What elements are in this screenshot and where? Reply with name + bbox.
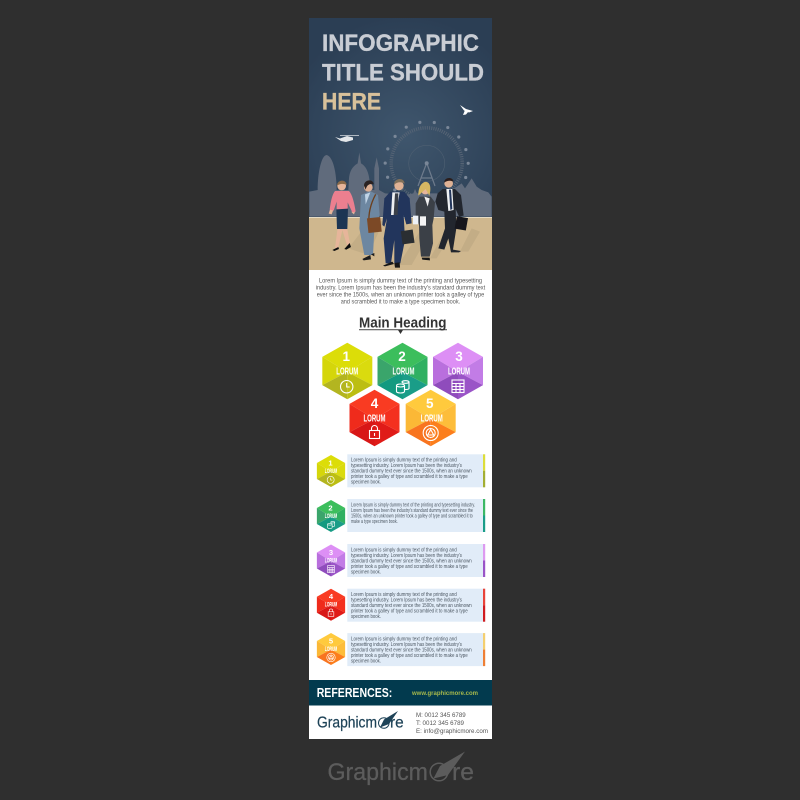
hexagon 3 (433, 343, 483, 399)
contact details: E: info@graphicmore.com (416, 728, 488, 735)
hexagon 4: 4 (371, 396, 379, 411)
text box 5: printer took a galley of type and scrambled it to make a type (351, 653, 468, 659)
small hexagon 1: 1 (328, 458, 333, 467)
text box 1: specimen book. (351, 480, 381, 486)
small hexagon 4: 4 (329, 592, 334, 601)
row 1 (317, 454, 485, 487)
text box 2: Lorem Ipsum has been the industry's standard dummy text ever since the (351, 508, 473, 514)
person: woman in pink (329, 181, 356, 251)
text box 2: Lorem Ipsum is simply dummy text of the printing and typesetting industry. (351, 503, 475, 509)
title (322, 30, 484, 116)
small hexagon 3: 3 (329, 548, 333, 557)
ferris wheel (385, 122, 468, 205)
small hexagon 5: 5 (329, 636, 334, 645)
title: TITLE SHOULD (322, 60, 484, 86)
icon: plane (460, 105, 473, 115)
text box 2: make a type specimen book. (351, 519, 398, 525)
references bar: REFERENCES: (317, 686, 392, 700)
row 2 (317, 499, 485, 532)
hexagon 2: LORUM (392, 366, 415, 378)
text box 3: typesetting industry. Lorem Ipsum has been the industry's (351, 553, 462, 559)
person: blonde woman in dark suit (413, 182, 435, 260)
title: HERE (322, 88, 381, 116)
contact details (416, 712, 488, 735)
text box 1: printer took a galley of type and scrambled it to make a type (351, 474, 468, 480)
small hexagon 5: LORUM (325, 647, 337, 653)
small hexagon 3 (317, 545, 345, 576)
small hexagon 2: 2 (328, 503, 333, 512)
small hexagon 1: LORUM (325, 469, 337, 475)
logo: Graphicmore: re (390, 715, 404, 732)
intro text block: and scrambled it to make a type specimen book. (341, 298, 460, 306)
hexagon 5: 5 (426, 396, 434, 411)
text box 1: Lorem Ipsum is simply dummy text of the printing and (351, 458, 457, 464)
hexagon 4 (350, 390, 400, 446)
text box 5: standard dummy text ever since the 1500s, when an unknown (351, 648, 472, 654)
hexagon 2: 2 (398, 349, 406, 364)
text box 2: 1500s, when an unknown printer took a galley of type and scrambled it to (351, 514, 473, 520)
watermark logo: Graphicm (328, 759, 428, 786)
hexagon 1: LORUM (336, 366, 358, 378)
small hexagon 4 (317, 589, 345, 621)
text box 3: standard dummy text ever since the 1500s, when an unknown (351, 558, 472, 564)
text box 1 (347, 454, 485, 487)
business people group (329, 178, 480, 268)
text box 3: printer took a galley of type and scrambled it to make a type (351, 564, 468, 570)
header illustration (309, 18, 492, 270)
hexagon 5: LORUM (421, 412, 443, 424)
small hexagon 1 (317, 455, 345, 487)
small hexagon 4: LORUM (325, 603, 337, 609)
person: woman in slate suit (359, 180, 382, 260)
hexagon 5 (406, 390, 456, 446)
watermark logo (328, 752, 474, 786)
panel: infographic sheet (309, 18, 492, 739)
small hexagon 2 (317, 500, 345, 532)
intro text block: Lorem Ipsum is simply dummy text of the printing and typesetting (319, 278, 482, 284)
text box 4: specimen book. (351, 614, 381, 620)
city skyline (309, 152, 492, 217)
contact details: M: 0012 345 6789 (416, 712, 466, 719)
hexagon 1 (322, 343, 372, 399)
text box 5: specimen book. (351, 659, 381, 665)
text box 2 (347, 499, 485, 532)
row 4 (317, 589, 485, 622)
text box 4: standard dummy text ever since the 1500s, when an unknown (351, 603, 472, 609)
person: man in navy suit (382, 179, 415, 268)
intro text block: ever since the 1500s, when an unknown printer took a galley of type (317, 292, 485, 298)
text box 4: Lorem Ipsum is simply dummy text of the printing and (351, 592, 457, 598)
text box 1: typesetting industry. Lorem Ipsum has been the industry's (351, 463, 462, 469)
small hexagon 3: LORUM (325, 558, 337, 564)
title: INFOGRAPHIC (322, 30, 479, 57)
hexagon 4: LORUM (364, 412, 386, 424)
row 5 (317, 633, 485, 666)
logo: Graphicmore: Graphicm (317, 715, 377, 732)
intro text block: industry. Lorem Ipsum has been the industry's standard dummy text (316, 284, 485, 292)
text box 5: Lorem Ipsum is simply dummy text of the printing and (351, 637, 457, 643)
small hexagon 5 (317, 633, 345, 665)
watermark logo: re (452, 759, 474, 786)
main heading: Main Heading (359, 314, 446, 331)
person: man in black suit (435, 178, 468, 252)
ground shadows (348, 218, 480, 265)
text box 1: standard dummy text ever since the 1500s, when an unknown (351, 469, 472, 475)
intro text block (316, 278, 485, 306)
icon: helicopter (335, 135, 359, 142)
references bar: www.graphicmore.com (411, 690, 478, 697)
logo: Graphicmore (317, 711, 404, 732)
small hexagon 2: LORUM (325, 514, 337, 520)
contact details: T: 0012 345 6789 (416, 720, 464, 727)
text box 4: printer took a galley of type and scrambled it to make a type (351, 609, 468, 615)
text box 3: specimen book. (351, 569, 381, 575)
text box 4 (347, 589, 485, 622)
text box 5 (347, 633, 485, 666)
hexagon 3: 3 (455, 349, 463, 364)
text box 5: typesetting industry. Lorem Ipsum has been the industry's (351, 642, 462, 648)
text box 3: Lorem Ipsum is simply dummy text of the printing and (351, 547, 457, 553)
row 3 (317, 544, 485, 577)
hexagon 3: LORUM (448, 366, 470, 378)
text box 4: typesetting industry. Lorem Ipsum has been the industry's (351, 598, 462, 604)
references bar (309, 680, 492, 706)
hexagon 2 (378, 343, 428, 399)
text box 3 (347, 544, 485, 577)
hexagon 1: 1 (343, 349, 351, 364)
